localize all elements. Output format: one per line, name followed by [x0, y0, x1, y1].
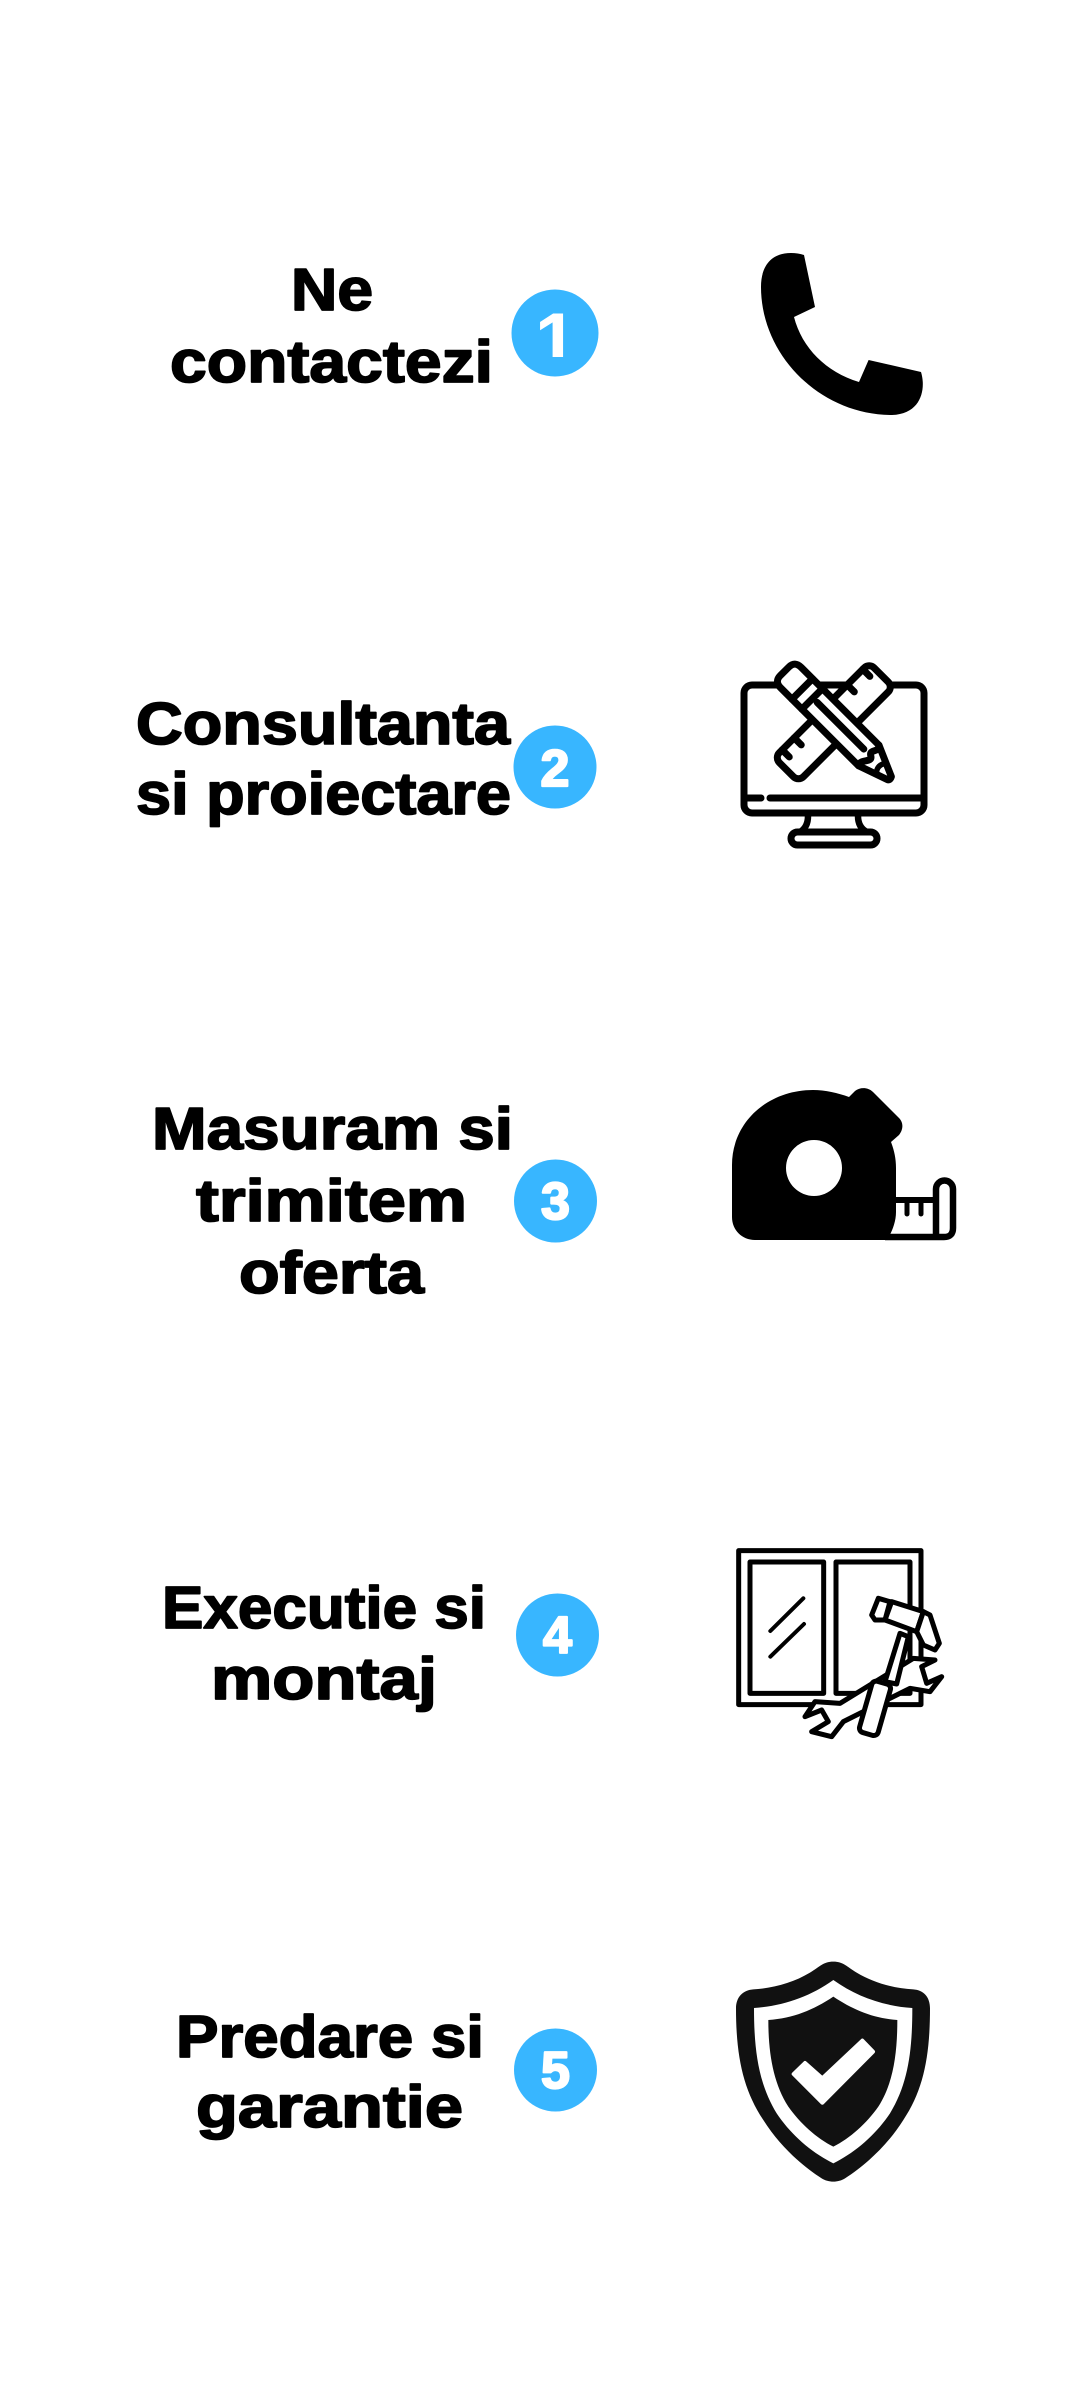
badge: number 3: 3	[541, 1173, 570, 1231]
heading: Masuram si trimitem oferta: Masuram si	[152, 1096, 513, 1162]
heading: Executie si montaj: montaj	[211, 1646, 437, 1712]
heading: Consultanta si proiectare	[136, 691, 511, 827]
heading: Consultanta si proiectare: si proiectare	[136, 761, 511, 827]
panel: step 5	[176, 1962, 930, 2182]
heading: Ne contactezi: contactezi	[170, 329, 493, 395]
badge: number 4	[516, 1594, 599, 1676]
panel: step 1	[170, 253, 923, 415]
heading: Predare si garantie: garantie	[196, 2074, 463, 2140]
panel: step 3	[152, 1088, 953, 1306]
badge: number 1: 1	[535, 298, 577, 383]
heading: Masuram si trimitem oferta: oferta	[239, 1240, 425, 1306]
heading: Predare si garantie	[176, 2004, 484, 2140]
badge: number 4: 4	[543, 1607, 572, 1665]
heading: Ne contactezi: Ne	[291, 257, 373, 323]
heading: Executie si montaj: Executie si	[162, 1575, 486, 1641]
badge: number 2: 2	[541, 740, 569, 798]
badge: number 3	[514, 1160, 597, 1242]
panel: step 2	[136, 661, 924, 845]
heading: Consultanta si proiectare: Consultanta	[136, 691, 511, 757]
heading: Predare si garantie: Predare si	[176, 2004, 484, 2070]
icon: window with hammer and wrench	[739, 1551, 942, 1737]
icon: shield with check mark	[736, 1962, 930, 2182]
badge: number 1	[512, 290, 598, 383]
heading: Masuram si trimitem oferta	[152, 1096, 513, 1306]
icon: telephone handset	[761, 253, 923, 415]
icon: monitor with pencil and ruler	[744, 661, 924, 845]
heading: Executie si montaj	[162, 1575, 486, 1712]
heading: Masuram si trimitem oferta: trimitem	[196, 1168, 467, 1234]
panel: step 4	[162, 1551, 942, 1737]
badge: number 5: 5	[541, 2042, 570, 2100]
heading: Ne contactezi	[170, 257, 493, 395]
badge: number 2	[514, 726, 596, 808]
icon: tape measure	[732, 1088, 953, 1240]
badge: number 5	[514, 2028, 597, 2112]
